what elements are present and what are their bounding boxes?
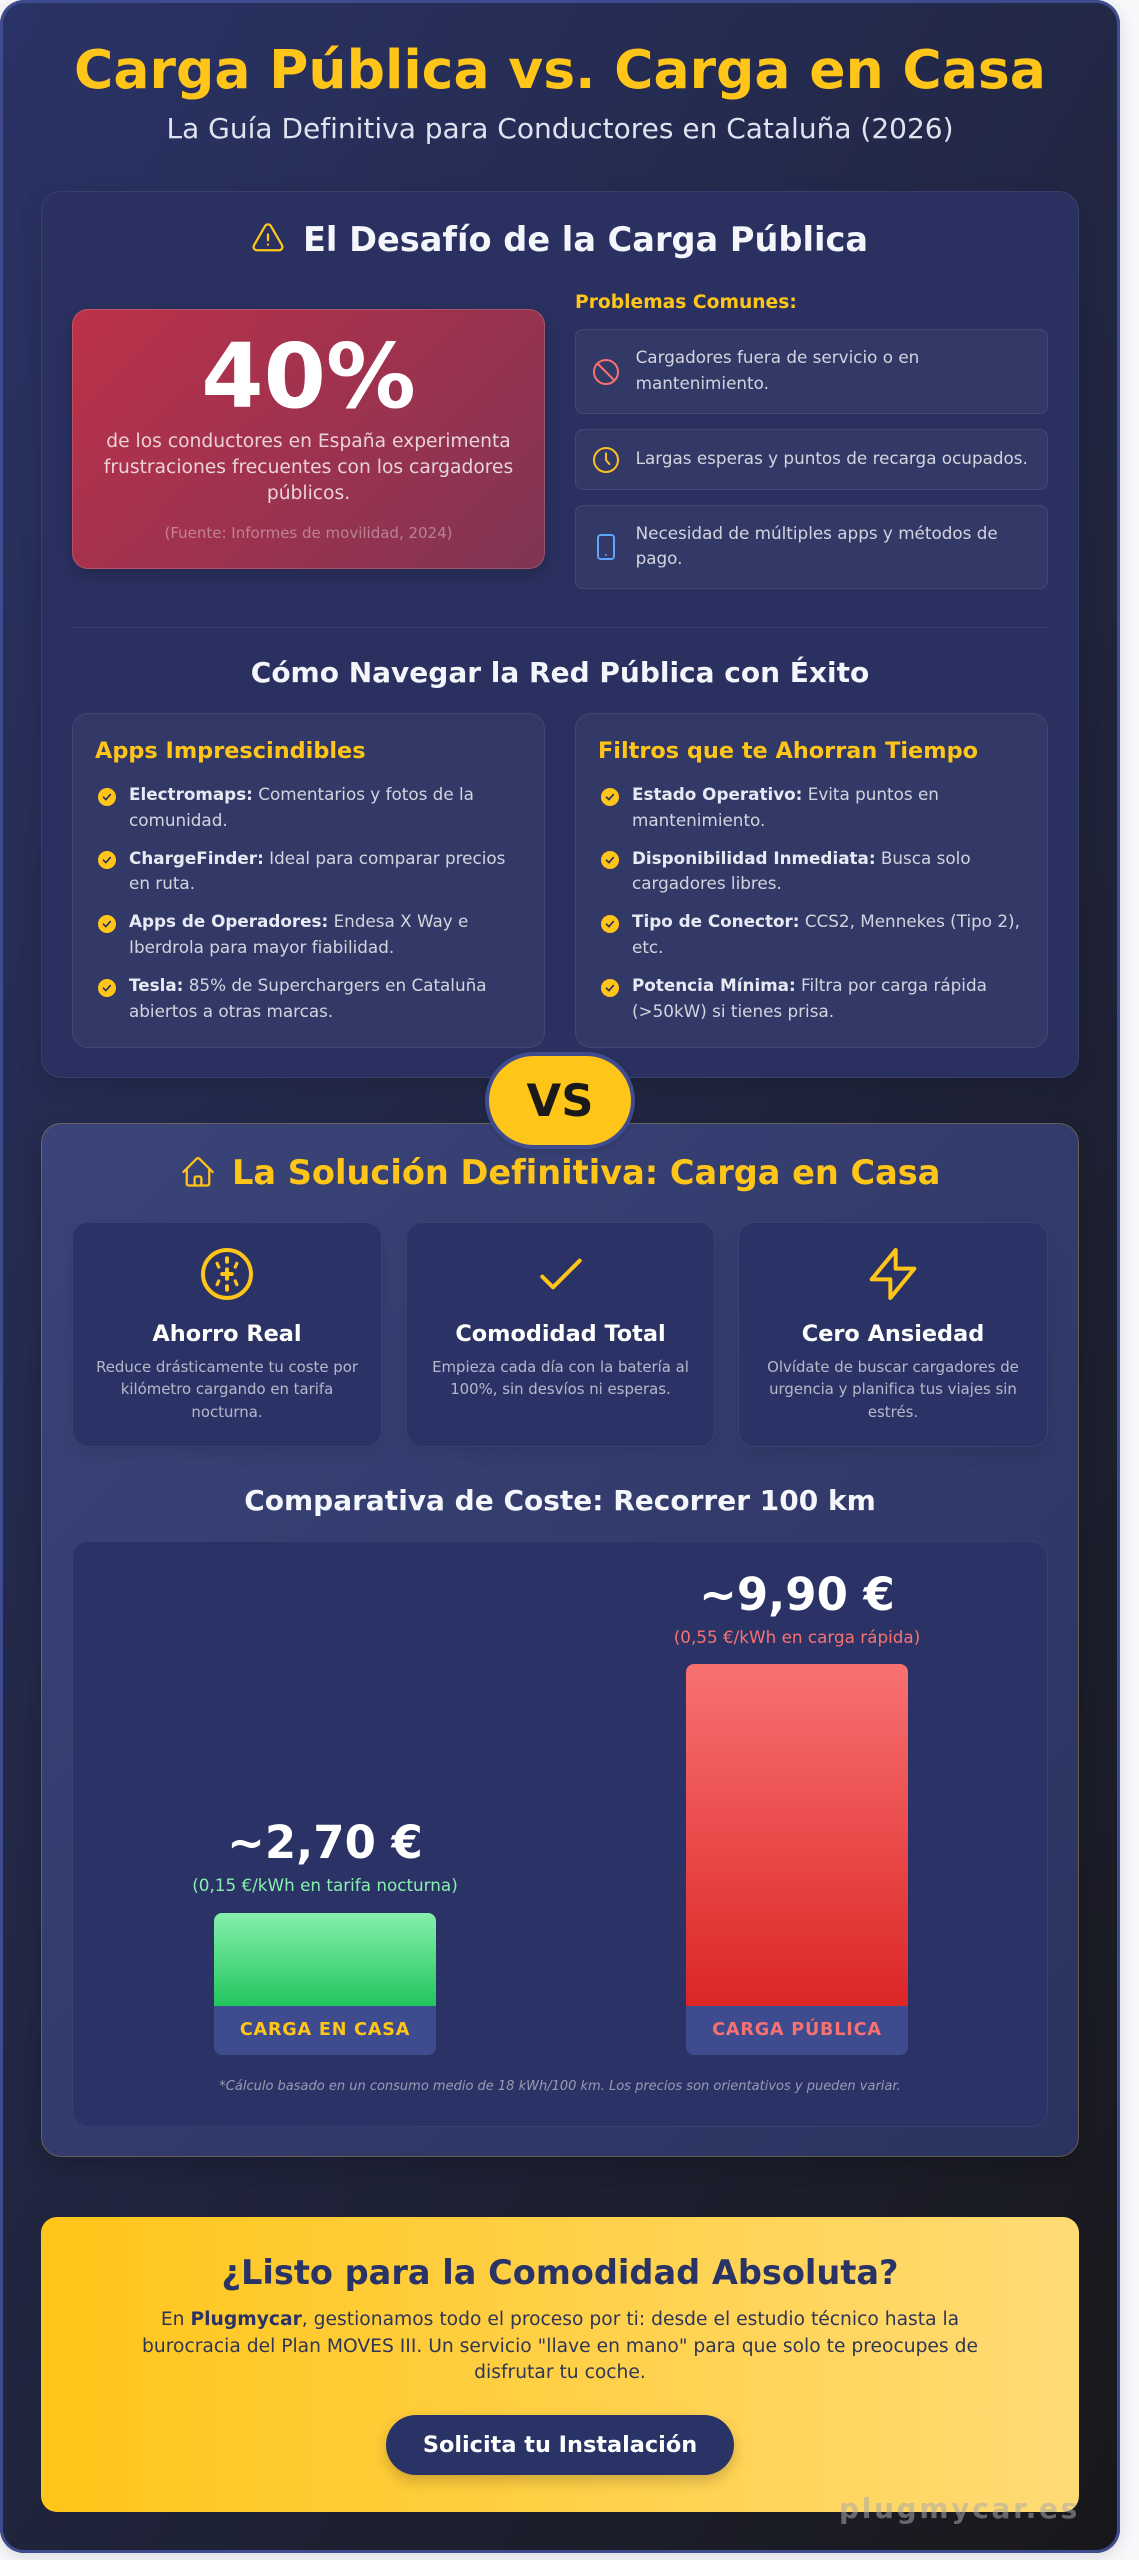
icon: house — [182, 1157, 214, 1187]
card text: kilómetro cargando en tarifa — [121, 1380, 333, 1398]
item text — [632, 784, 939, 830]
item text — [129, 848, 505, 893]
item text: en ruta. — [129, 873, 195, 893]
icon: check — [601, 788, 619, 806]
card title: Comodidad Total — [455, 1321, 666, 1347]
icon: check mark — [540, 1258, 582, 1290]
item text: etc. — [632, 937, 663, 957]
CTA heading: ¿Listo para la Comodidad Absoluta? — [221, 2253, 899, 2292]
problem card: out of service — [575, 329, 1048, 414]
price detail: (0,15 €/kWh en tarifa nocturna) — [192, 1875, 458, 1895]
card text — [738, 1356, 1048, 1423]
problem text: pago. — [636, 548, 682, 568]
CTA text: disfrutar tu coche. — [474, 2362, 646, 2383]
benefit card: total comfort — [406, 1222, 715, 1447]
item text — [632, 975, 987, 1021]
stat card: 40% — [72, 309, 545, 568]
list item: ChargeFinder — [98, 848, 505, 893]
price: ~2,70 € — [227, 1816, 423, 1869]
card text: 100%, sin desvíos ni esperas. — [450, 1380, 671, 1398]
common problems list — [575, 292, 1048, 589]
price detail: (0,55 €/kWh en carga rápida) — [674, 1627, 920, 1647]
benefit card: real savings — [72, 1222, 382, 1447]
VS text: VS — [527, 1074, 593, 1127]
card title: Cero Ansiedad — [802, 1321, 984, 1347]
panel: home charging solution — [41, 1123, 1079, 2157]
stat description: frustraciones frecuentes con los cargadores — [104, 457, 513, 478]
stat number: 40% — [201, 325, 416, 429]
bar label: CARGA EN CASA — [240, 2020, 410, 2040]
problems heading: Problemas Comunes: — [575, 292, 797, 312]
bar column: home charging — [214, 1813, 436, 2055]
card text: estrés. — [868, 1403, 918, 1421]
CTA button: Solicita tu Instalación — [423, 2432, 697, 2458]
stat description: de los conductores en España experimenta — [106, 431, 511, 452]
price: ~9,90 € — [699, 1568, 895, 1621]
item text — [632, 848, 971, 893]
CTA text — [41, 2307, 1079, 2387]
list item: connector type — [601, 911, 1020, 957]
card title: Ahorro Real — [152, 1321, 302, 1347]
VS badge — [485, 1052, 635, 1149]
icon: check — [601, 915, 619, 933]
list item: operating status — [601, 784, 939, 830]
stat description — [104, 431, 513, 504]
item text — [129, 911, 468, 957]
CTA button — [386, 2415, 734, 2475]
icon: check — [98, 979, 116, 997]
item text — [129, 784, 474, 830]
problem text: Cargadores fuera de servicio o en — [636, 347, 919, 367]
card: time-saving filters — [575, 713, 1048, 1048]
bar label: CARGA PÚBLICA — [712, 2020, 882, 2040]
item text: Iberdrola para mayor fiabilidad. — [129, 937, 394, 957]
icon: savings coin — [201, 1248, 253, 1300]
item text — [632, 911, 1020, 957]
problem text: Largas esperas y puntos de recarga ocupados. — [636, 448, 1028, 468]
heading: navigating the public network: Cómo Navegar la Red Pública con Éxito — [251, 656, 869, 689]
problem card: waiting — [575, 429, 1048, 490]
card text: Empieza cada día con la batería al — [432, 1358, 689, 1376]
bar label — [214, 2006, 436, 2055]
card heading: Apps Imprescindibles — [95, 738, 366, 764]
problem text: mantenimiento. — [636, 373, 769, 393]
card text — [432, 1358, 689, 1398]
heading: home charging solution — [182, 1152, 940, 1192]
heading text: La Solución Definitiva: Carga en Casa — [232, 1152, 940, 1192]
stat description: públicos. — [267, 483, 350, 504]
watermark: plugmycar.es — [839, 2492, 1080, 2525]
icon: smartphone — [597, 534, 615, 560]
call to action panel — [41, 2217, 1079, 2512]
list item: Tesla — [98, 975, 487, 1021]
list item: availability — [601, 848, 971, 893]
icon: check — [98, 915, 116, 933]
icon: clock — [593, 447, 619, 473]
heading text: El Desafío de la Carga Pública — [303, 220, 868, 258]
title: Carga Pública vs. Carga en Casa — [74, 38, 1046, 101]
icon: check — [601, 851, 619, 869]
item text: mantenimiento. — [632, 810, 765, 830]
item text: Electromaps: Comentarios y fotos de la — [129, 784, 474, 804]
bar — [214, 1913, 436, 2006]
card heading: Filtros que te Ahorran Tiempo — [598, 738, 978, 764]
panel: public charging challenge — [41, 191, 1079, 1078]
item text: ChargeFinder: Ideal para comparar precios — [129, 848, 505, 868]
problem card: multiple apps — [575, 505, 1048, 589]
bar column: public charging — [686, 1565, 908, 2055]
icon: warning triangle — [252, 223, 284, 252]
CTA text: burocracia del Plan MOVES III. Un servicio "llave en mano" para que solo te preocupes de — [142, 2336, 978, 2357]
benefit card: zero anxiety — [738, 1222, 1048, 1447]
card text: Reduce drásticamente tu coste por — [96, 1358, 358, 1376]
subtitle: La Guía Definitiva para Conductores en Cataluña (2026) — [166, 112, 954, 144]
item text: comunidad. — [129, 810, 228, 830]
problem text — [636, 347, 919, 393]
bar label — [686, 2006, 908, 2055]
problem text: Necesidad de múltiples apps y métodos de — [636, 522, 998, 542]
icon: check — [98, 851, 116, 869]
item text: Apps de Operadores: Endesa X Way e — [129, 911, 468, 931]
list item: Electromaps — [98, 784, 474, 830]
item text: Tesla: 85% de Superchargers en Cataluña — [129, 975, 487, 995]
footnote: *Cálculo basado en un consumo medio de 18 kWh/100 km. Los precios son orientativos y pueden variar. — [219, 2079, 901, 2094]
stat source: (Fuente: Informes de movilidad, 2024) — [164, 524, 453, 542]
problem text — [636, 522, 998, 568]
icon: check — [98, 788, 116, 806]
item text: Disponibilidad Inmediata: Busca solo — [632, 848, 971, 868]
list item: minimum power — [601, 975, 987, 1021]
item text: cargadores libres. — [632, 873, 782, 893]
icon: lightning bolt — [870, 1248, 916, 1300]
icon: check — [601, 979, 619, 997]
heading: public charging challenge — [252, 220, 868, 258]
card: essential apps — [72, 713, 545, 1048]
item text: Potencia Mínima: Filtra por carga rápida — [632, 975, 987, 995]
icon: no symbol — [593, 359, 619, 385]
list item: operator apps — [98, 911, 468, 957]
item text: (>50kW) si tienes prisa. — [632, 1001, 834, 1021]
item text: abiertos a otras marcas. — [129, 1001, 333, 1021]
bar chart: cost comparison — [72, 1541, 1048, 2127]
item text: Tipo de Conector: CCS2, Mennekes (Tipo 2), — [632, 911, 1020, 931]
bar — [686, 1664, 908, 2006]
item text: Estado Operativo: Evita puntos en — [632, 784, 939, 804]
card text: nocturna. — [191, 1403, 263, 1421]
CTA text: En Plugmycar, gestionamos todo el proceso por ti: desde el estudio técnico hasta la — [161, 2309, 959, 2330]
card text: Olvídate de buscar cargadores de — [767, 1358, 1019, 1376]
card text: urgencia y planifica tus viajes sin — [769, 1380, 1017, 1398]
heading: cost comparison: Comparativa de Coste: Recorrer 100 km — [244, 1484, 876, 1517]
card text — [96, 1358, 358, 1421]
item text — [129, 975, 487, 1021]
